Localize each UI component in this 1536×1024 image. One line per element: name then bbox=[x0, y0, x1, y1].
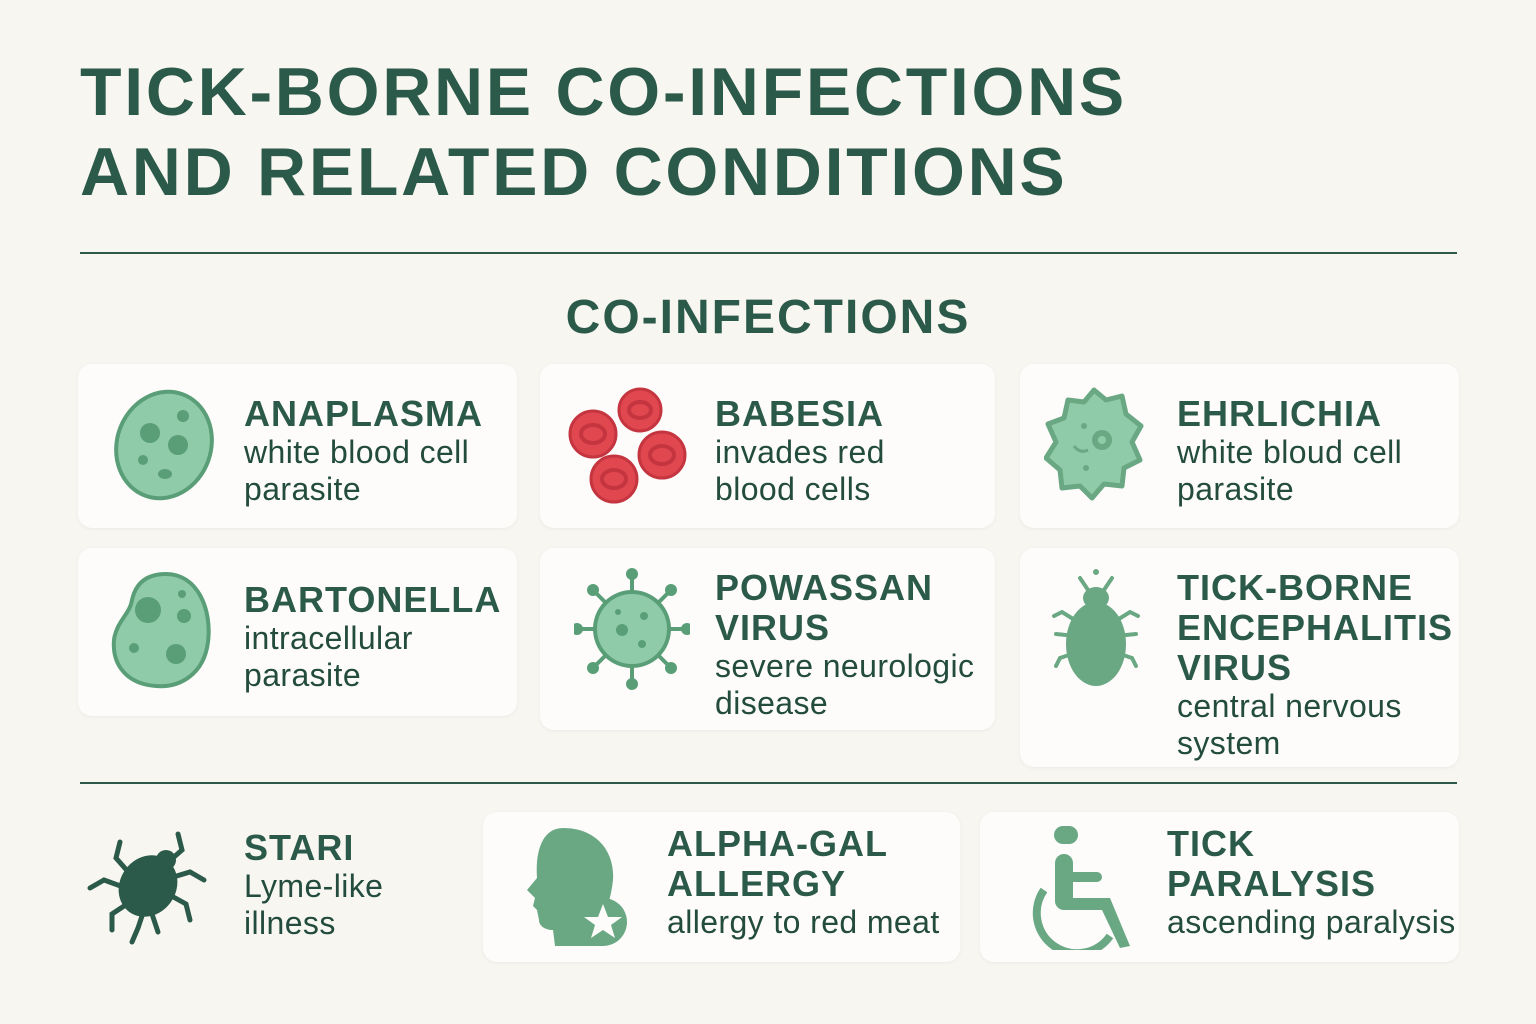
icon: tick bbox=[1052, 569, 1140, 686]
panel: babesia: blood cells bbox=[715, 471, 871, 507]
panel: ehrlichia: white bloud cell bbox=[1177, 434, 1402, 470]
icon: cell bbox=[114, 390, 214, 500]
title bbox=[80, 54, 1127, 210]
panel: babesia bbox=[540, 364, 995, 528]
panel: powassan: VIRUS bbox=[715, 607, 830, 648]
panel: stari: STARI bbox=[244, 827, 354, 868]
panel: tick-borne encephalitis: system bbox=[1177, 725, 1281, 761]
panel: bartonella: parasite bbox=[244, 657, 361, 693]
panel: bartonella bbox=[78, 548, 517, 716]
icon: virus bbox=[574, 568, 690, 690]
panel: tick-borne encephalitis bbox=[1020, 548, 1459, 767]
icon: red blood cells bbox=[568, 388, 686, 504]
icon: cell bbox=[112, 572, 211, 688]
icon: head with star bbox=[527, 828, 627, 946]
panel: alpha-gal allergy: allergy to red meat bbox=[667, 904, 940, 940]
panel: tick-borne encephalitis: central nervous bbox=[1177, 688, 1402, 724]
panel: tick-borne encephalitis: VIRUS bbox=[1177, 647, 1292, 688]
panel: ehrlichia bbox=[1020, 364, 1459, 528]
panel: ehrlichia: EHRLICHIA bbox=[1177, 393, 1382, 434]
section heading: co-infections: CO-INFECTIONS bbox=[566, 291, 970, 344]
panel: stari bbox=[88, 827, 383, 944]
panel: tick paralysis: ascending paralysis bbox=[1167, 904, 1456, 940]
icon: dark tick bbox=[88, 832, 206, 944]
panel: anaplasma bbox=[78, 364, 517, 528]
panel: tick paralysis bbox=[980, 812, 1459, 962]
panel: tick paralysis: PARALYSIS bbox=[1167, 863, 1376, 904]
panel: babesia: invades red bbox=[715, 434, 885, 470]
title: TICK-BORNE CO-INFECTIONS bbox=[80, 54, 1127, 130]
panel: powassan: disease bbox=[715, 685, 828, 721]
panel: bartonella: intracellular bbox=[244, 620, 413, 656]
panel: tick-borne encephalitis: ENCEPHALITIS bbox=[1177, 607, 1453, 648]
panel: powassan bbox=[540, 548, 995, 730]
panel: alpha-gal allergy bbox=[483, 812, 960, 962]
panel: alpha-gal allergy: ALPHA-GAL bbox=[667, 823, 888, 864]
panel: stari: illness bbox=[244, 905, 336, 941]
panel: stari: Lyme-like bbox=[244, 868, 383, 904]
panel: powassan: POWASSAN bbox=[715, 567, 933, 608]
panel: bartonella: BARTONELLA bbox=[244, 579, 501, 620]
panel: powassan: severe neurologic bbox=[715, 648, 974, 684]
panel: anaplasma: parasite bbox=[244, 471, 361, 507]
panel: tick paralysis: TICK bbox=[1167, 823, 1255, 864]
panel: anaplasma: white blood cell bbox=[244, 434, 469, 470]
icon: amoeba cell bbox=[1044, 388, 1144, 500]
icon: wheelchair bbox=[1032, 826, 1130, 950]
panel: alpha-gal allergy: ALLERGY bbox=[667, 863, 846, 904]
panel: ehrlichia: parasite bbox=[1177, 471, 1294, 507]
panel: babesia: BABESIA bbox=[715, 393, 884, 434]
panel: anaplasma: ANAPLASMA bbox=[244, 393, 483, 434]
panel: tick-borne encephalitis: TICK-BORNE bbox=[1177, 567, 1413, 608]
title: AND RELATED CONDITIONS bbox=[80, 134, 1067, 210]
